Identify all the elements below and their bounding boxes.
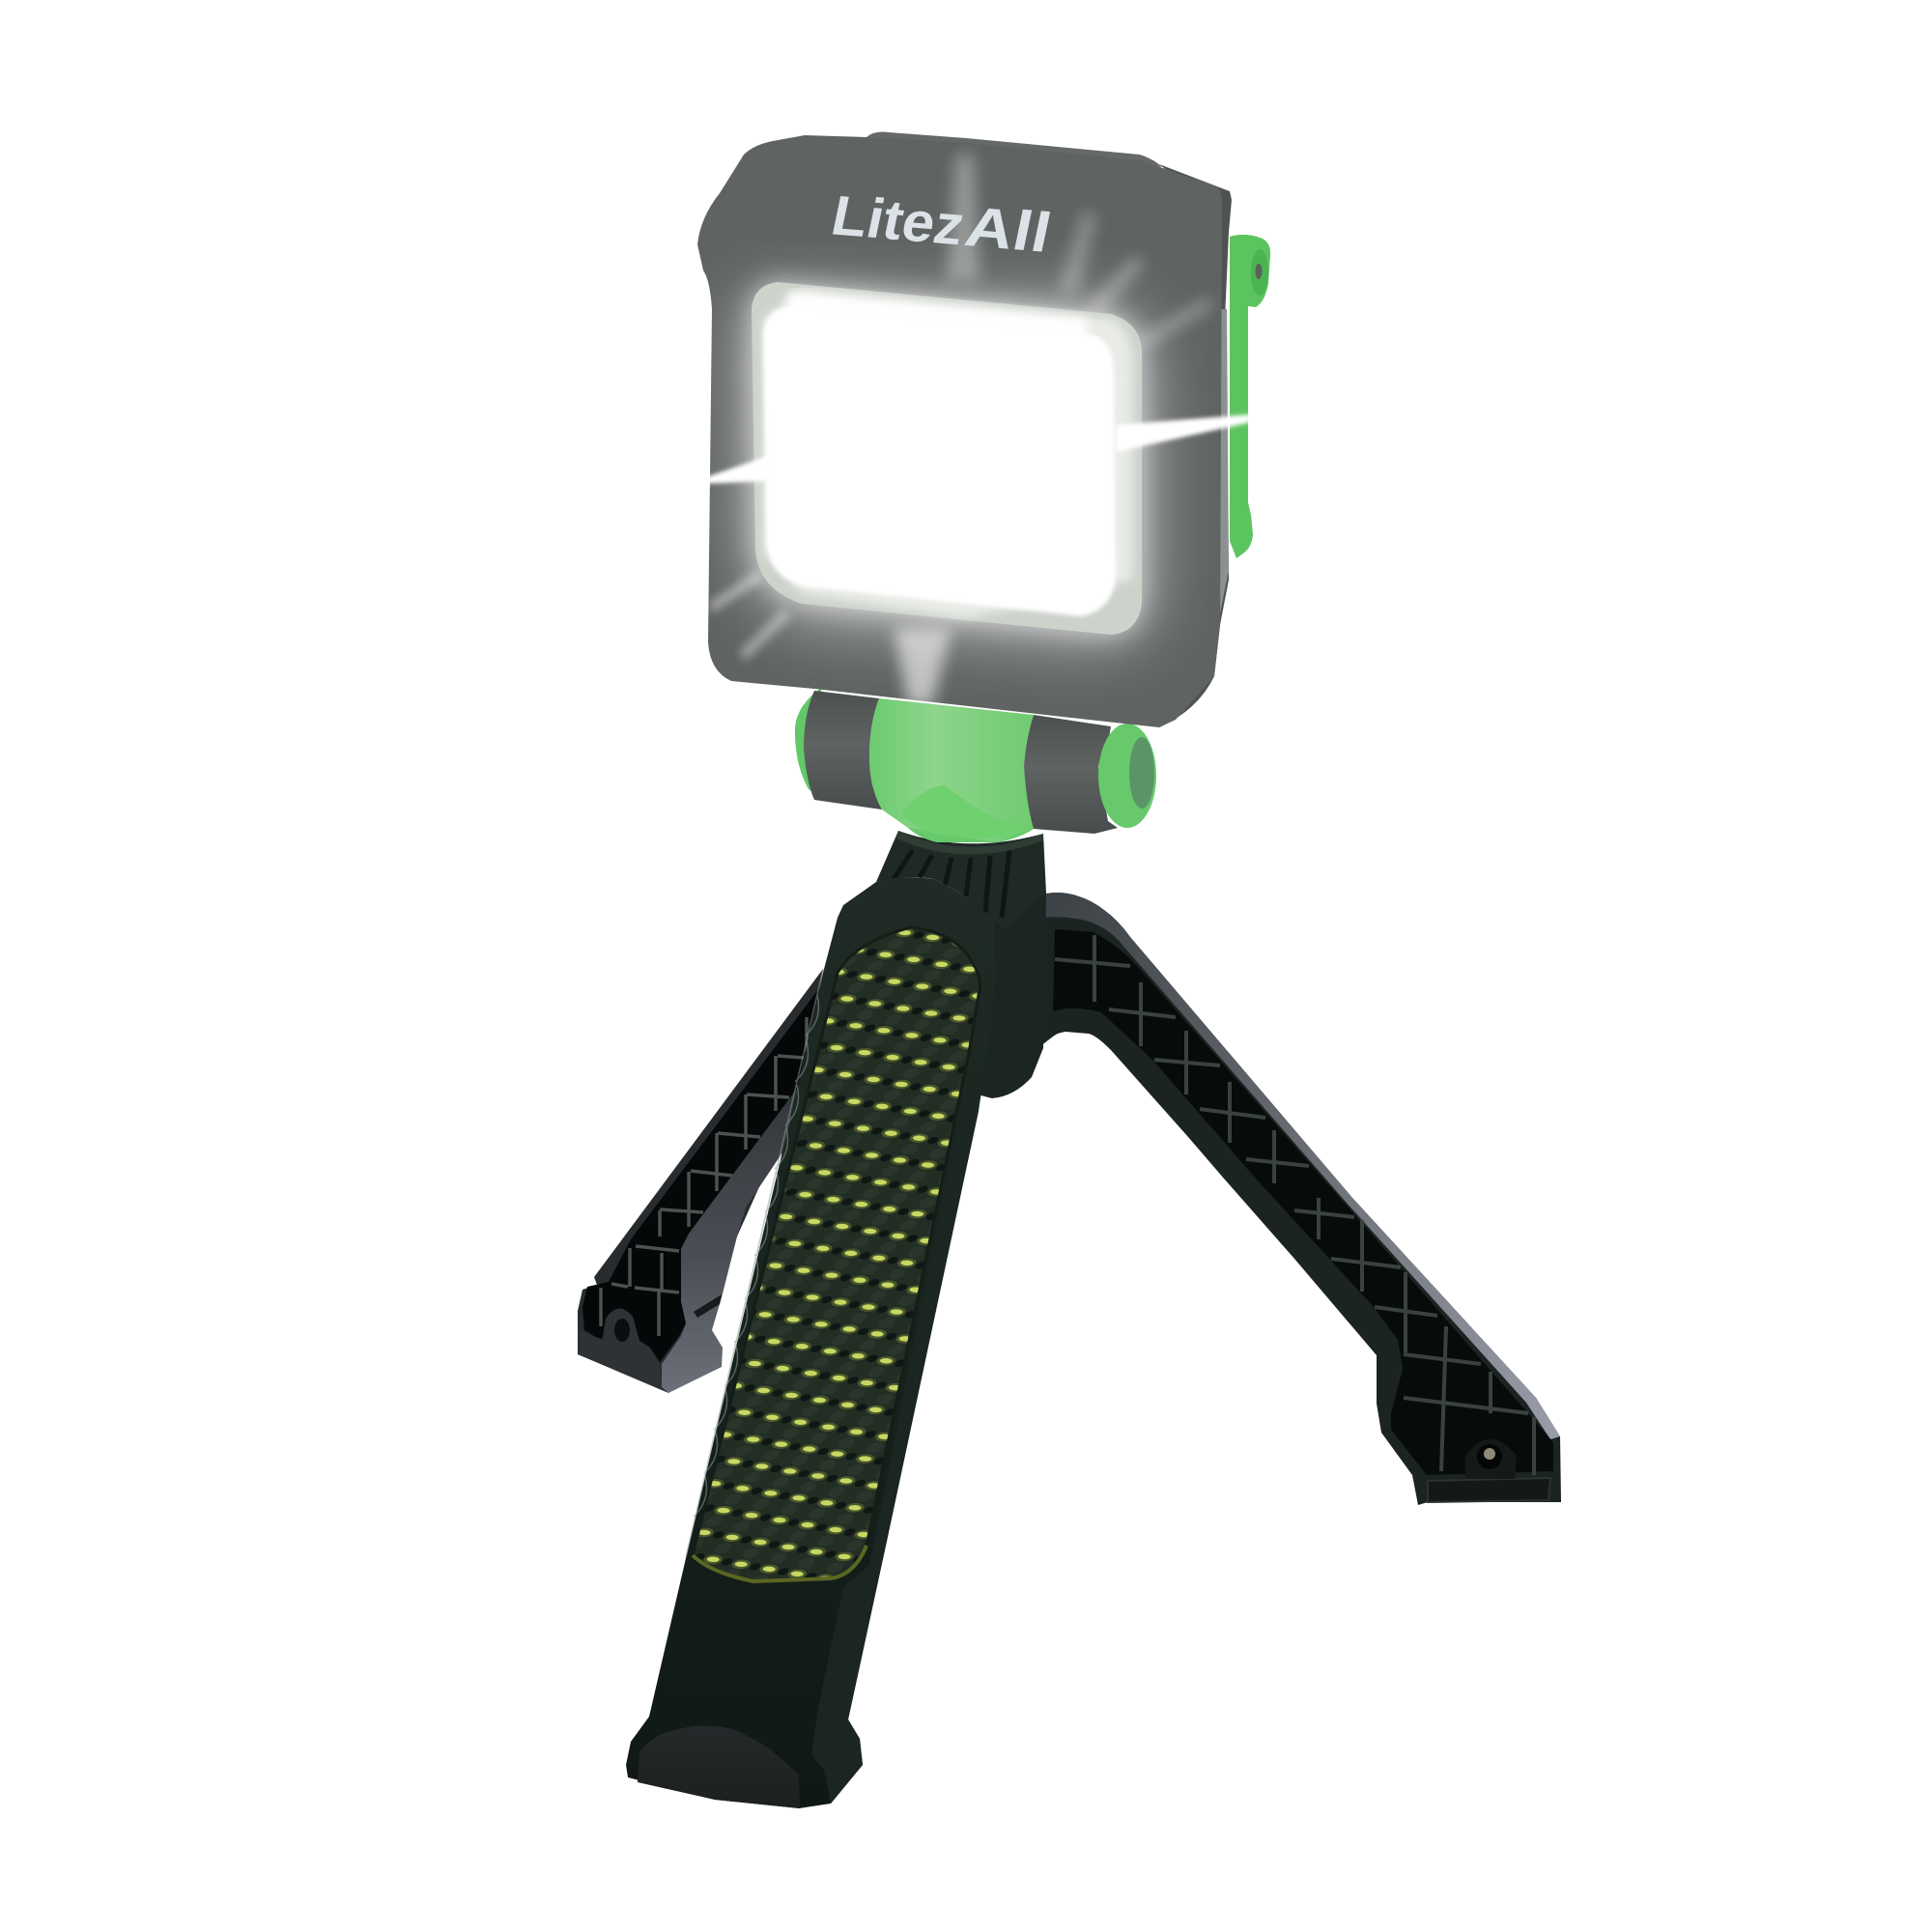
- near light glow: [752, 282, 1142, 635]
- body side: [1159, 164, 1232, 727]
- wide light glow: [744, 299, 1150, 642]
- left tripod leg: [578, 969, 823, 1393]
- neck: [901, 782, 1036, 842]
- lens frame: [752, 282, 1142, 635]
- grip handle: [626, 877, 995, 1808]
- hinge end cap: [1098, 724, 1156, 828]
- tripod stand: [578, 831, 1561, 1808]
- top ridge: [867, 132, 1162, 167]
- logo: All: [960, 196, 1057, 265]
- light flares: [697, 414, 1251, 484]
- clip screw: [1251, 249, 1268, 296]
- right leg lattice: [1055, 935, 1534, 1475]
- right leg foot plate with screw: [1428, 1439, 1550, 1502]
- right facet of grip: [811, 1111, 979, 1804]
- pad lower olive rim: [693, 1546, 867, 1581]
- left leg base plate: [578, 1309, 662, 1389]
- left end cap: [795, 688, 821, 797]
- lamp head: [676, 116, 1270, 842]
- frame bright band: [763, 290, 1133, 618]
- swivel hinge: [795, 688, 1156, 842]
- pad left scalloped highlight: [686, 969, 823, 1557]
- foot cap: [638, 1726, 800, 1808]
- right tripod leg: [1038, 893, 1561, 1505]
- faint light rays: [708, 155, 1212, 705]
- rubber grip pad: [693, 927, 980, 1581]
- lens: [763, 306, 1116, 616]
- logo: [826, 185, 1057, 265]
- product illustration: work light on tripod: [578, 131, 1561, 1808]
- logo: Litez: [826, 185, 970, 257]
- front face: [697, 135, 1222, 727]
- grey folding arm: [662, 1089, 797, 1393]
- central pillar and ribbed collar: [876, 831, 1046, 1098]
- side clip green: [1230, 235, 1270, 558]
- left leg lattice: [601, 1017, 807, 1336]
